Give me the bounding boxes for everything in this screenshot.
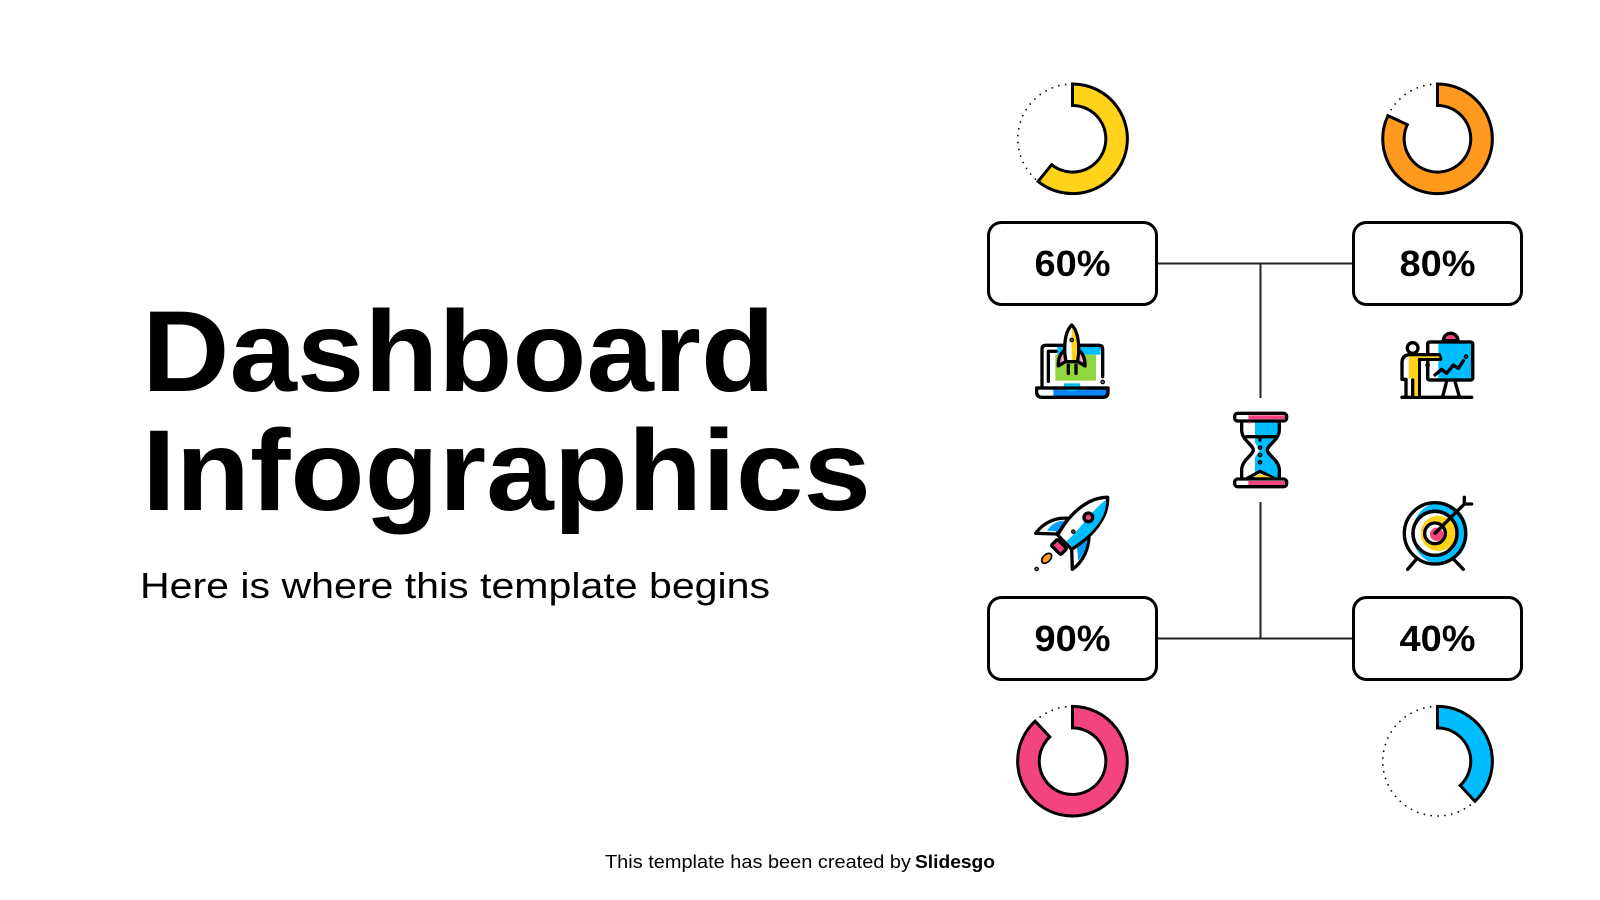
donut chart: 80% orange bbox=[1383, 84, 1492, 194]
value box: 90% bbox=[988, 598, 1156, 680]
value box: 90%: 90% bbox=[1034, 618, 1110, 659]
donut chart: 40% blue bbox=[1383, 706, 1492, 816]
icon: hourglass bbox=[1235, 413, 1287, 487]
value box: 60% bbox=[988, 222, 1156, 304]
title: Infographics bbox=[142, 407, 871, 535]
value box: 60%: 60% bbox=[1034, 243, 1110, 284]
icon: presenter at chart board bbox=[1402, 333, 1473, 397]
subtitle: Here is where this template begins bbox=[140, 565, 770, 606]
footer credit: This template has been created by bbox=[605, 852, 911, 872]
icon: laptop with rocket bbox=[1037, 325, 1108, 397]
value box: 80% bbox=[1354, 222, 1522, 304]
value box: 40% bbox=[1354, 598, 1522, 680]
title: Dashboard bbox=[142, 288, 775, 416]
donut chart: 60% yellow bbox=[1018, 84, 1127, 194]
connector lines bbox=[1157, 264, 1353, 638]
icon: rocket bbox=[1036, 497, 1108, 570]
footer credit: Slidesgo bbox=[915, 852, 995, 872]
value box: 80%: 80% bbox=[1400, 243, 1476, 284]
value box: 40%: 40% bbox=[1400, 618, 1476, 659]
donut chart: 90% pink bbox=[1018, 706, 1127, 816]
title bbox=[142, 288, 871, 535]
icon: target with arrow bbox=[1404, 497, 1472, 569]
